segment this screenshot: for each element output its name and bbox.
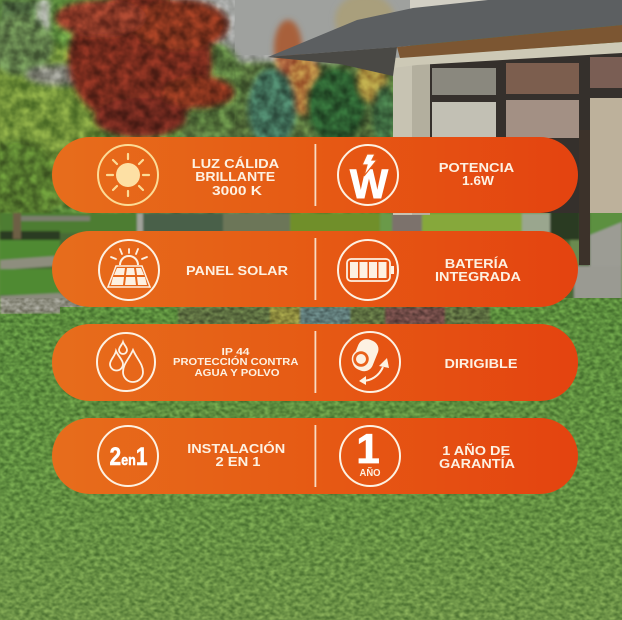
divider 3 xyxy=(314,331,316,393)
text: ip 44: AGUA Y POLVO xyxy=(194,367,280,379)
text: potencia: 1.6W xyxy=(462,173,495,188)
green tree on the left xyxy=(0,0,102,230)
text: instalación: 2 EN 1 xyxy=(216,454,260,469)
text: luz cálida: LUZ CÁLIDA xyxy=(192,156,280,171)
middle band of garden xyxy=(0,190,622,314)
text: dirigible: DIRIGIBLE xyxy=(444,356,518,371)
text: batería integrada: INTEGRADA xyxy=(435,269,522,284)
text: ip 44: IP 44 xyxy=(222,346,250,358)
red tree xyxy=(55,0,234,138)
foliage texture, right side xyxy=(235,55,393,215)
text: ip 44: PROTECCIÓN CONTRA xyxy=(173,355,299,368)
flower bed xyxy=(178,307,490,325)
icon: 2 en 1: 2en1 xyxy=(110,443,148,471)
text: instalación: INSTALACIÓN xyxy=(187,441,285,456)
icon: 1 año: AÑO xyxy=(360,466,381,479)
panel: row 2 xyxy=(52,231,578,307)
distant autumn trees xyxy=(180,0,396,148)
icon: sun xyxy=(98,145,158,205)
icon: power W xyxy=(338,145,398,207)
panel: row 1 xyxy=(52,137,578,213)
roof xyxy=(268,0,622,76)
panel: row 4 xyxy=(52,418,578,494)
icon: adjustable lamp xyxy=(340,332,400,392)
lawn xyxy=(0,314,622,620)
text: luz cálida: 3000 K xyxy=(212,183,263,198)
divider 4 xyxy=(314,425,316,487)
icon: solar panel xyxy=(99,240,159,300)
icon: 1 año xyxy=(340,425,400,486)
icon: battery xyxy=(338,240,398,300)
divider 2 xyxy=(314,238,316,300)
text: garantía: 1 AÑO DE xyxy=(442,443,511,458)
text: luz cálida: BRILLANTE xyxy=(195,169,276,184)
text: garantía: GARANTÍA xyxy=(439,456,516,471)
house wall and windows xyxy=(393,0,622,265)
icon: power W: W xyxy=(350,161,388,207)
icon: 2 en 1 xyxy=(98,426,158,486)
panel: row 3 xyxy=(52,324,578,401)
text: batería integrada: BATERÍA xyxy=(445,256,509,271)
divider 1 xyxy=(314,144,316,206)
text: panel solar: PANEL SOLAR xyxy=(186,263,289,278)
text: potencia: POTENCIA xyxy=(439,160,515,175)
lawn texture xyxy=(0,298,622,620)
icon: 1 año: 1 xyxy=(356,425,380,472)
foliage texture xyxy=(0,0,235,215)
sky xyxy=(170,0,410,70)
icon: water drops xyxy=(97,333,155,391)
